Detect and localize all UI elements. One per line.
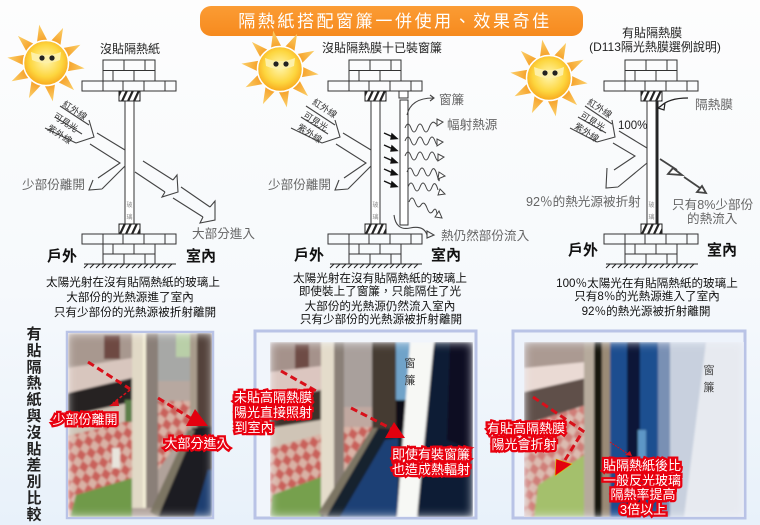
red dashed light path 1 bbox=[88, 362, 208, 426]
description 3: 只有8％的光熱源進入了室內 bbox=[574, 289, 720, 303]
photo 2 labels bbox=[234, 390, 470, 477]
vertical heading: 紙 bbox=[26, 391, 42, 409]
label: indoor 2: 室內 bbox=[431, 246, 461, 264]
description 3 bbox=[556, 276, 738, 318]
photo 2 labels: 也造成熱輻射 bbox=[392, 462, 470, 477]
light type labels 1: 可見光 bbox=[52, 110, 80, 134]
arrow: film pointer bbox=[658, 98, 688, 110]
title banner bbox=[200, 6, 583, 36]
label: 8 percent enters bbox=[672, 198, 754, 226]
arrow: incoming and reflected light 2 bbox=[291, 106, 371, 190]
description 2: 即使裝上了窗簾，只能隔住了光 bbox=[299, 284, 462, 298]
vertical heading: 貼 bbox=[26, 342, 42, 359]
light type labels 3: 可見光 bbox=[579, 109, 607, 133]
label: outdoor 3: 戶外 bbox=[568, 241, 598, 259]
label: outdoor 2: 戶外 bbox=[294, 246, 324, 264]
vertical heading: 貼 bbox=[26, 441, 42, 458]
photo 3 labels: 一般反光玻璃 bbox=[603, 473, 681, 488]
arrow: heat flows in under curtain bbox=[394, 215, 434, 238]
label: small part leaves 2: 少部份離開 bbox=[268, 178, 331, 192]
label: heat still flows in: 熱仍然部份流入 bbox=[441, 228, 530, 243]
panel 3 heading: 有貼隔熱膜 bbox=[622, 25, 682, 40]
title banner: 隔熱紙搭配窗簾一併使用、效果奇佳 bbox=[238, 11, 552, 31]
panel: no film with curtain diagram bbox=[241, 31, 530, 326]
description 2: 太陽光射在沒有貼隔熱紙的玻璃上 bbox=[293, 271, 467, 285]
photo 1 labels: 少部份離開 bbox=[52, 412, 118, 427]
label: curtain in photo 2 bbox=[404, 357, 416, 387]
panel 3 heading bbox=[589, 25, 721, 54]
label: 8 percent enters: 的熱流入 bbox=[687, 211, 738, 226]
description 1: 大部份的光熱源進了室內 bbox=[66, 290, 194, 304]
label: most enters 1: 大部分進入 bbox=[192, 227, 255, 241]
label: 8 percent enters: 只有8%少部份 bbox=[672, 198, 754, 212]
label: curtain in photo 2: 簾 bbox=[404, 373, 416, 387]
light type labels 2: 可見光 bbox=[302, 109, 330, 133]
wall and glass 2 bbox=[328, 60, 422, 268]
label: outdoor 1: 戶外 bbox=[47, 247, 77, 265]
label: indoor 3: 室內 bbox=[707, 241, 737, 259]
arrow: incoming and reflected light 1 bbox=[45, 106, 125, 190]
description 1 bbox=[46, 275, 220, 319]
label: radiated heat: 幅射熱源 bbox=[447, 117, 498, 132]
description 1: 太陽光射在沒有貼隔熱紙的玻璃上 bbox=[46, 275, 220, 289]
film layer bbox=[656, 101, 658, 224]
label: curtain in photo 3 bbox=[704, 364, 714, 394]
light type labels 1: 紫外線 bbox=[46, 122, 74, 146]
photo 2 labels: 陽光直接照射 bbox=[234, 405, 312, 420]
light type labels 3 bbox=[573, 96, 614, 144]
label: curtain: 窗簾 bbox=[439, 92, 464, 107]
wall and glass 1 bbox=[82, 60, 176, 268]
icon: sun 1 bbox=[7, 25, 85, 101]
panel 3 heading: (D113隔光熱膜選例說明) bbox=[589, 40, 721, 54]
arrow: transmitted light 1 bbox=[135, 161, 215, 223]
vertical heading: 熱 bbox=[26, 374, 42, 392]
photo 1: window without film bbox=[52, 328, 230, 522]
panel: with film diagram bbox=[510, 25, 754, 318]
photo 3 labels: 貼隔熱紙後比 bbox=[603, 458, 681, 473]
photo 3 labels bbox=[487, 421, 681, 517]
arrow: incoming and reflected light 3 bbox=[570, 106, 647, 188]
photo 2: window with curtain bbox=[234, 331, 478, 522]
wall and glass 3 bbox=[604, 60, 698, 268]
light type labels 3: 紫外線 bbox=[573, 120, 601, 144]
panel 1 heading: 沒貼隔熱紙 bbox=[100, 41, 160, 56]
label: indoor 1: 室內 bbox=[186, 247, 216, 265]
photo 3 labels: 有貼高隔熱膜 bbox=[487, 421, 565, 436]
label: small part leaves 1: 少部份離開 bbox=[22, 178, 85, 192]
vertical heading: 比 bbox=[26, 490, 42, 507]
arrow: curtain pointer bbox=[407, 95, 434, 115]
photo 1 labels: 大部分進入 bbox=[164, 436, 230, 451]
photo 2 labels: 未貼高隔熱膜 bbox=[234, 390, 312, 405]
photo 2 labels: 即使有裝窗簾 bbox=[392, 447, 470, 462]
label: film: 隔熱膜 bbox=[695, 98, 733, 112]
light type labels 1: 紅外線 bbox=[61, 98, 89, 122]
panel 2 heading: 沒貼隔熱膜十已裝窗簾 bbox=[322, 40, 442, 55]
description 1: 只有少部份的光熱源被折射離開 bbox=[54, 305, 216, 319]
label: 100 percent: 100% bbox=[618, 120, 647, 132]
vertical heading: 沒 bbox=[26, 423, 42, 441]
vertical heading: 別 bbox=[26, 474, 42, 491]
description 3: 100％太陽光在有貼隔熱紙的玻璃上 bbox=[556, 276, 738, 290]
description 3: 92％的熱光源被折射離開 bbox=[582, 304, 710, 318]
light type labels 2: 紅外線 bbox=[311, 96, 339, 120]
photo 2 labels: 到室內 bbox=[234, 420, 274, 435]
photo 3 labels: 3倍以上 bbox=[620, 502, 666, 517]
label: curtain in photo 3: 簾 bbox=[704, 380, 714, 394]
photo 1 labels bbox=[52, 412, 230, 451]
photo 3 labels: 隔熱率提高 bbox=[610, 487, 676, 502]
icon: sun 3 bbox=[510, 40, 588, 116]
description 2: 大部份的光熱源仍然流入室內 bbox=[305, 299, 455, 313]
description 2: 只有少部份的光熱源被折射離開 bbox=[300, 312, 462, 326]
arrows: heat passing the glass bbox=[384, 133, 397, 187]
vertical heading: 差 bbox=[26, 456, 42, 474]
light type labels 2 bbox=[296, 96, 339, 145]
photo 3 labels: 陽光會折射 bbox=[491, 437, 557, 452]
red dashed light path 3 bbox=[533, 397, 632, 476]
label: curtain in photo 3: 窗 bbox=[704, 364, 714, 377]
label: 92 percent reflected: 92％的熱光源被折射 bbox=[526, 194, 641, 209]
vertical heading: 與 bbox=[26, 408, 42, 425]
panel: no film diagram bbox=[7, 25, 255, 319]
light type labels 3: 紅外線 bbox=[586, 96, 614, 120]
photo 3: window with film bbox=[487, 331, 749, 522]
arrow: transmitted light 3 bbox=[660, 159, 706, 193]
icon: sun 2 bbox=[241, 31, 319, 107]
vertical heading: 有 bbox=[26, 326, 42, 343]
vertical heading: 較 bbox=[26, 505, 42, 523]
light type labels 2: 紫外線 bbox=[296, 121, 324, 145]
curtain bbox=[399, 91, 408, 225]
light type labels 1 bbox=[46, 98, 89, 146]
description 2 bbox=[293, 271, 467, 326]
vertical heading: 隔 bbox=[26, 359, 42, 376]
arrows: radiated heat waves bbox=[405, 119, 445, 218]
label: curtain in photo 2: 窗 bbox=[404, 357, 416, 370]
red dashed light path 2 bbox=[281, 371, 405, 438]
